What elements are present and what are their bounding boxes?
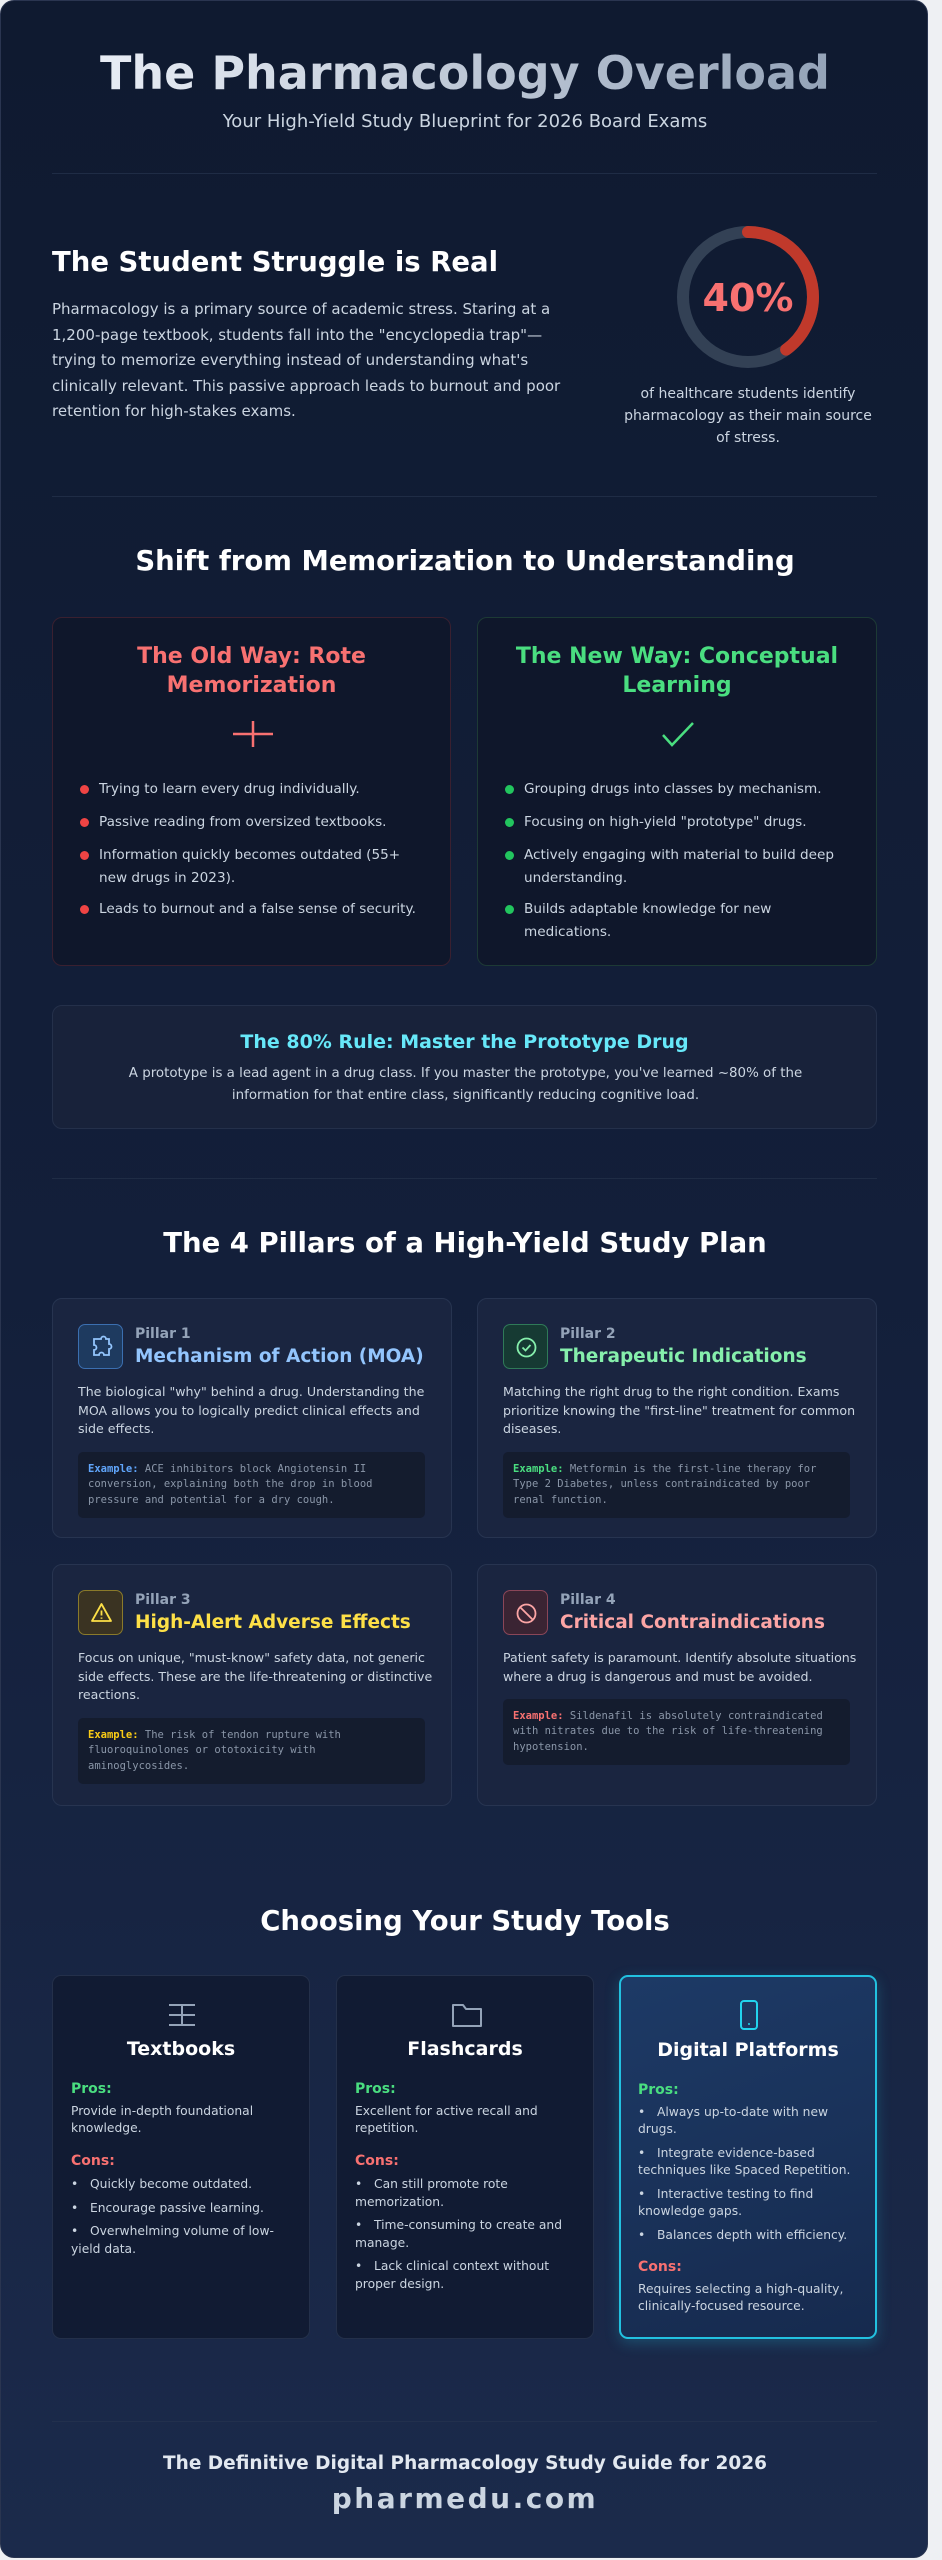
heading: old way <box>137 644 366 698</box>
panel: textbooks: • Encourage passive learning. <box>71 2200 264 2214</box>
callout: 80% rule <box>52 1005 877 1129</box>
example: indications: Example: Metformin is the first-line therapy for Type 2 Diabetes, unless contraindicated by poor renal function. <box>513 1463 816 1506</box>
panel: flashcards: Cons: <box>355 2152 399 2168</box>
icon: cross <box>233 721 273 747</box>
title: The Pharmacology Overload <box>100 46 830 100</box>
panel: pillar 3: Focus on unique, "must-know" safety data, not generic side effects. These are the life-threatening or distinctive reactions. <box>78 1650 432 1702</box>
heading: new way: Learning <box>622 673 732 698</box>
panel: pillar 3: Pillar 3 <box>135 1592 191 1608</box>
example: indications <box>503 1452 850 1518</box>
heading: new way: The New Way: Conceptual <box>516 644 838 669</box>
heading: new way <box>516 644 838 698</box>
panel: flashcards <box>336 1975 594 2339</box>
chart: 40% donut: 40% <box>703 276 793 320</box>
heading: 4 pillars: The 4 Pillars of a High-Yield Study Plan <box>163 1227 767 1259</box>
panel: digital platforms: • Balances depth with efficiency. <box>638 2228 847 2242</box>
panel: textbooks: Cons: <box>71 2152 115 2168</box>
icon: puzzle <box>78 1324 123 1369</box>
panel: pillar 1 <box>52 1298 452 1538</box>
list: new way <box>505 781 834 940</box>
heading: 80% rule: The 80% Rule: Master the Prototype Drug <box>240 1031 689 1053</box>
panel: pillar 2 <box>477 1298 877 1538</box>
icon: folder <box>452 2004 482 2027</box>
heading: adverse effects: High-Alert Adverse Effects <box>135 1612 411 1633</box>
panel: new way <box>477 617 877 966</box>
subtitle: Your High-Yield Study Blueprint for 2026 Board Exams <box>223 111 707 132</box>
list: old way <box>80 781 416 917</box>
heading: old way: Memorization <box>167 673 336 698</box>
example: MOA <box>78 1452 425 1518</box>
panel: pillar 1: The biological "why" behind a drug. Understanding the MOA allows you to logically predict clinical effects and side effects. <box>78 1384 424 1436</box>
text: 80% rule: A prototype is a lead agent in a drug class. If you master the prototype, you've learned ~80% of the information for that entire class, significantly reducing cognitive load. <box>129 1066 802 1103</box>
panel: old way <box>52 617 451 966</box>
icon: warning <box>78 1590 123 1635</box>
icon: check circle <box>503 1324 548 1369</box>
example: adverse effects: Example: The risk of tendon rupture with fluoroquinolones or ototoxicity with aminoglycosides. <box>88 1729 341 1772</box>
list: new way: Actively engaging with material to build deep understanding. <box>524 847 834 886</box>
list: old way: Trying to learn every drug individually. <box>99 781 360 797</box>
chart: 40% donut <box>677 226 819 368</box>
panel: flashcards: • Can still promote rote memorization. <box>355 2177 508 2208</box>
panel: digital platforms: Pros: <box>638 2082 679 2098</box>
icon: textbook <box>169 2004 195 2026</box>
heading: indications: Therapeutic Indications <box>560 1346 807 1367</box>
list: old way: Leads to burnout and a false sense of security. <box>99 901 416 917</box>
panel: pillar 2: Pillar 2 <box>560 1326 616 1342</box>
panel: pillar 4 <box>477 1564 877 1806</box>
heading: shift: Shift from Memorization to Understanding <box>135 545 795 577</box>
panel: digital platforms: • Integrate evidence-based techniques like Spaced Repetition. <box>638 2146 850 2177</box>
panel: flashcards: Excellent for active recall and repetition. <box>355 2104 538 2135</box>
list: old way: Passive reading from oversized textbooks. <box>99 814 386 830</box>
panel: pillar 2: Matching the right drug to the right condition. Exams prioritize knowing the "first-line" treatment for common diseases. <box>503 1384 855 1436</box>
panel: pillar 4: Pillar 4 <box>560 1592 616 1608</box>
caption: donut: of healthcare students identify pharmacology as their main source of stress. <box>624 386 872 446</box>
panel: flashcards: • Time-consuming to create and manage. <box>355 2218 562 2250</box>
panel: digital platforms: • Always up-to-date with new drugs. <box>638 2104 828 2136</box>
footer: site: pharmedu.com <box>332 2482 598 2515</box>
text: struggle paragraph: Pharmacology is a primary source of academic stress. Staring at a 1,200-page textbook, students fall into the "encyclopedia trap"—trying to memorize everything instead of understanding what's clinically relevant. This passive approach leads to burnout and poor retention for high-stakes exams. <box>52 300 560 420</box>
example: contraindications <box>503 1699 850 1765</box>
panel: digital platforms: Digital Platforms <box>657 2039 839 2061</box>
panel: pillar 3 <box>52 1564 452 1806</box>
heading: student struggle: The Student Struggle is Real <box>52 246 498 278</box>
panel: textbooks: • Overwhelming volume of low-yield data. <box>71 2224 274 2256</box>
panel: flashcards: Pros: <box>355 2081 396 2097</box>
panel: flashcards: • Lack clinical context without proper design. <box>355 2259 549 2290</box>
heading: contraindications: Critical Contraindications <box>560 1612 825 1633</box>
panel: textbooks: Pros: <box>71 2081 112 2097</box>
panel: textbooks: Provide in-depth foundational knowledge. <box>71 2104 253 2135</box>
panel: flashcards: Flashcards <box>407 2038 523 2060</box>
list: old way: Information quickly becomes outdated (55+ new drugs in 2023). <box>99 847 400 886</box>
example: contraindications: Example: Sildenafil is absolutely contraindicated with nitrates due to the risk of life-threatening hypotension. <box>513 1710 823 1753</box>
icon: check <box>662 722 694 747</box>
panel: textbooks: • Quickly become outdated. <box>71 2177 252 2191</box>
example: MOA: Example: ACE inhibitors block Angiotensin II conversion, explaining both the drop in blood pressure and potential for a dry cough. <box>88 1463 372 1506</box>
list: new way: Grouping drugs into classes by mechanism. <box>524 781 822 797</box>
footer: tagline: The Definitive Digital Pharmacology Study Guide for 2026 <box>163 2453 767 2474</box>
panel: digital platforms <box>619 1975 877 2339</box>
heading: study tools: Choosing Your Study Tools <box>260 1905 670 1937</box>
example: adverse effects <box>78 1718 425 1784</box>
panel: digital platforms: Requires selecting a high-quality, clinically-focused resource. <box>638 2282 843 2313</box>
panel: pillar 1: Pillar 1 <box>135 1326 191 1342</box>
heading: MOA: Mechanism of Action (MOA) <box>135 1346 424 1367</box>
icon: ban <box>503 1590 548 1635</box>
panel: digital platforms: Cons: <box>638 2259 682 2275</box>
panel: textbooks: Textbooks <box>127 2038 235 2060</box>
heading: old way: The Old Way: Rote <box>137 644 366 669</box>
panel: textbooks <box>52 1975 310 2339</box>
list: new way: Builds adaptable knowledge for new medications. <box>524 901 771 940</box>
icon: phone <box>740 2000 758 2030</box>
panel: digital platforms: • Interactive testing to find knowledge gaps. <box>638 2186 813 2218</box>
panel: pillar 4: Patient safety is paramount. Identify absolute situations where a drug is dangerous and must be avoided. <box>503 1650 856 1684</box>
list: new way: Focusing on high-yield "prototype" drugs. <box>524 814 807 830</box>
